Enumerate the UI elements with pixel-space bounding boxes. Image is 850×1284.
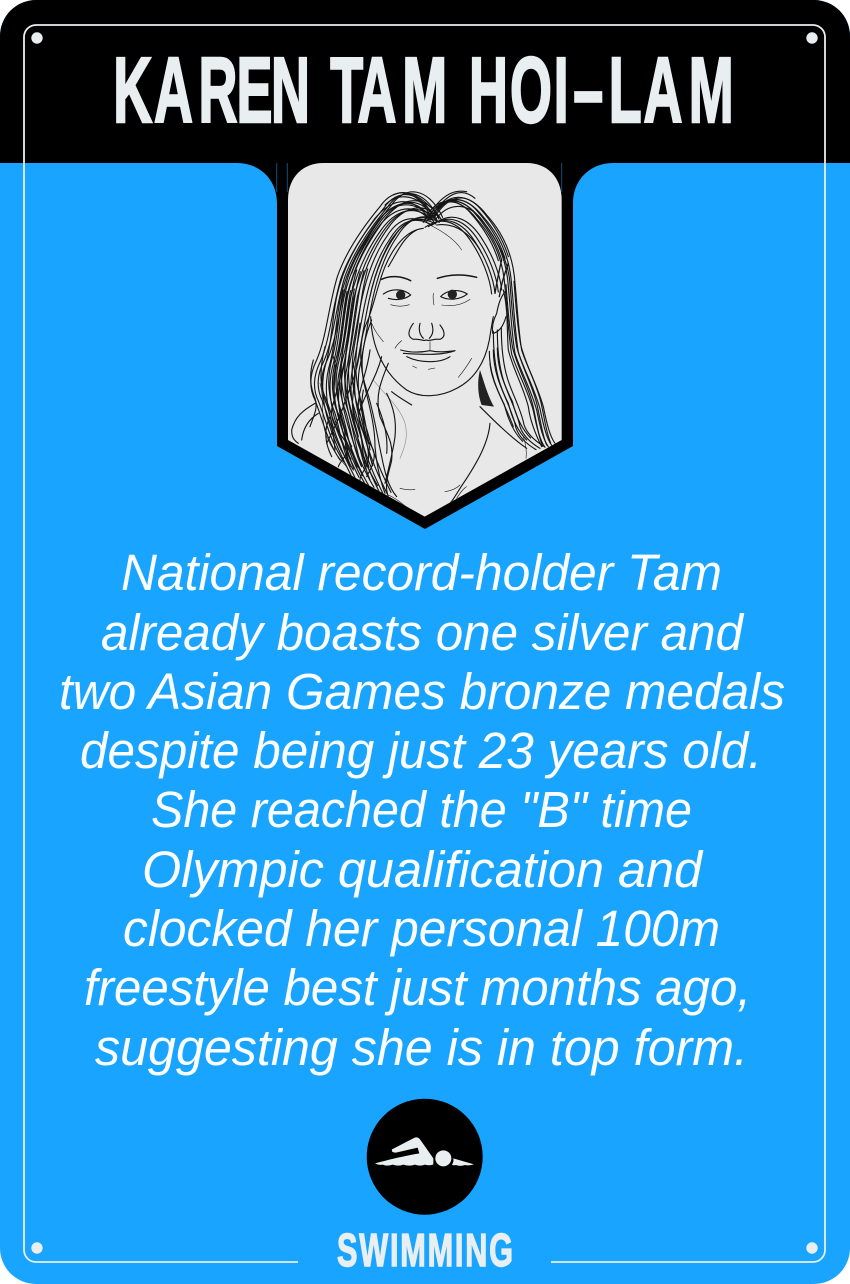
left hair strands offset three <box>322 192 443 492</box>
text block: description: despite being just 23 years old. <box>80 722 762 779</box>
right hair strands offset three <box>423 201 545 447</box>
text block: description: freestyle best just months ago, <box>84 959 751 1016</box>
nose <box>409 323 444 340</box>
left hair strands offset two <box>318 194 439 494</box>
ear <box>492 292 506 333</box>
neck and collar <box>392 392 490 503</box>
left hair strands offset <box>314 195 435 495</box>
text block: description: suggesting she is in top form. <box>95 1019 748 1076</box>
under-eye lines <box>391 293 470 306</box>
dark neck shadow <box>478 370 494 407</box>
portrait background <box>288 163 562 517</box>
icon: swimming badge <box>367 1099 483 1215</box>
text block: description <box>59 544 785 1076</box>
right hair lower strands offset two <box>497 281 551 446</box>
mouth <box>401 350 455 354</box>
right hair strands offset <box>430 199 552 445</box>
left eye <box>383 290 411 300</box>
text block: description: National record-holder Tam <box>121 544 722 601</box>
portrait illustration <box>288 163 562 517</box>
panel: black header with shield neck <box>0 0 850 203</box>
panel: portrait shield frame <box>277 163 573 529</box>
right hair lower strands <box>493 283 547 448</box>
right eye <box>441 291 467 299</box>
right hair lower strands offset <box>489 285 543 450</box>
text block: description: already boasts one silver and <box>101 604 745 661</box>
right hair strands <box>433 197 555 443</box>
portrait line work <box>292 191 555 512</box>
right hair top strands <box>435 206 510 283</box>
text block: description: Olympic qualification and <box>142 841 704 898</box>
text block: description: She reached the "B" time <box>151 781 692 838</box>
text block: description: two Asian Games bronze medals <box>59 663 785 720</box>
text block: description: clocked her personal 100m <box>123 900 720 957</box>
face contour <box>371 317 493 396</box>
left hair strands <box>311 193 432 493</box>
eyebrows <box>382 277 411 281</box>
hairline parting <box>430 225 462 250</box>
hair crown and inner strands <box>352 205 428 273</box>
category label: SWIMMING <box>337 1225 513 1277</box>
decorative hairlines in shield neck <box>277 163 562 192</box>
title: KAREN TAM HOI–LAM <box>113 39 734 143</box>
right hair strands offset two <box>427 201 548 447</box>
